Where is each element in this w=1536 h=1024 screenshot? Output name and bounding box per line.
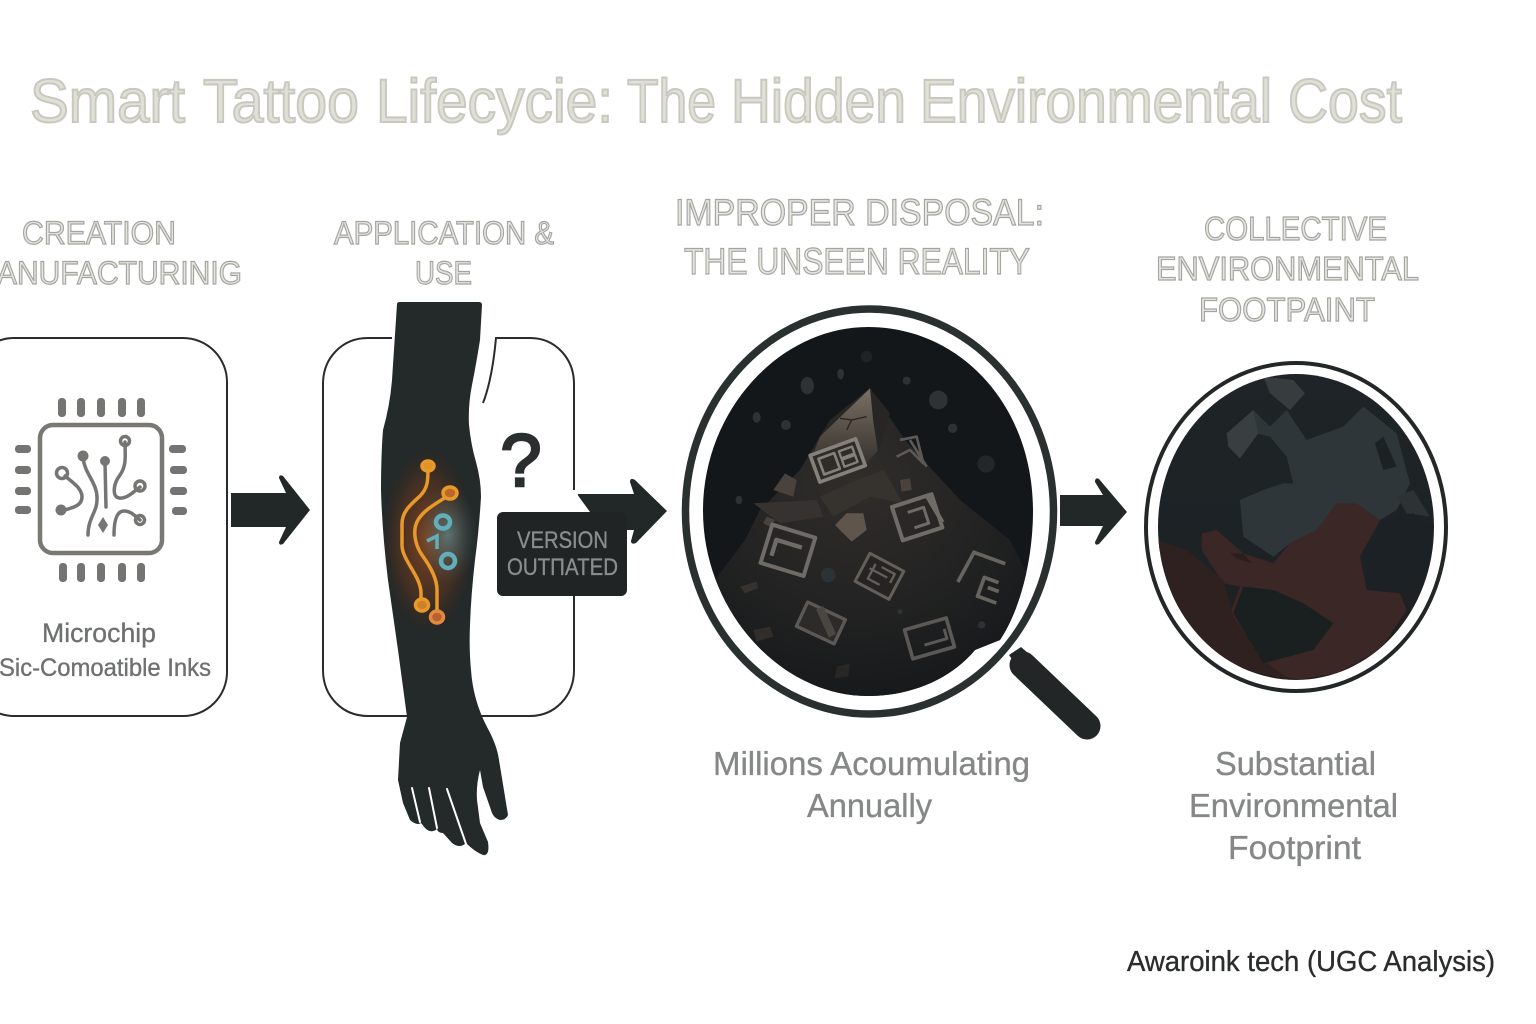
discarded tattoo chips [761, 437, 1010, 659]
title: Hidden [731, 67, 906, 135]
caption: microchip inks: Sic-Comoatible Inks [0, 654, 211, 682]
badge: version outdated: VERSION [517, 527, 608, 554]
heading: collective environmental footprint: ENVIRONMENTAL [1156, 250, 1419, 287]
title: Smart [30, 67, 185, 135]
arrow: application to disposal [578, 479, 667, 544]
heading: improper disposal [675, 192, 1044, 282]
title: Tattoo [203, 67, 359, 135]
heading: application and use: USE [415, 255, 472, 291]
arrow notch white [574, 490, 590, 512]
waste pile scene [700, 320, 1040, 700]
badge: version outdated [497, 512, 627, 596]
panel: application and use [323, 215, 667, 855]
gray continents [1227, 407, 1410, 557]
heading: improper disposal: THE UNSEEN REALITY [684, 241, 1030, 282]
caption: microchip inks [0, 618, 211, 682]
heading: collective environmental footprint: FOOTPAINT [1199, 291, 1375, 328]
icon: magnifying glass ring [686, 309, 1087, 726]
caption: millions accumulating: Millions Acoumulating [713, 745, 1030, 782]
dark landmasses [1233, 587, 1333, 663]
caption: millions accumulating: Annually [807, 787, 932, 824]
caption: substantial footprint: Environmental [1189, 787, 1398, 824]
finger gaps [412, 788, 466, 844]
caption: millions accumulating [713, 745, 1030, 824]
icon: question mark: ? [500, 419, 542, 502]
heading: collective environmental footprint [1156, 210, 1419, 328]
heading: collective environmental footprint: COLLECTIVE [1204, 210, 1387, 247]
tattoo glow [382, 448, 478, 632]
heading: application and use [334, 215, 554, 291]
badge: version outdated: OUTΠATED [507, 554, 618, 581]
caption: substantial footprint [1189, 745, 1398, 866]
panel: collective environmental footprint [1146, 210, 1446, 866]
floating particles [736, 351, 995, 629]
heading: creation manufacturing [0, 215, 242, 291]
circuit tattoo: orange traces [402, 461, 457, 623]
arrow: disposal to footprint [1060, 478, 1127, 545]
icon: globe [1150, 370, 1445, 685]
title: Environmental [920, 67, 1272, 135]
rubble pile [700, 388, 1040, 700]
panel: creation and manufacturing [0, 215, 242, 716]
title: Cost [1288, 67, 1402, 135]
arrow: creation to application [231, 475, 310, 545]
arm with hand [381, 302, 508, 855]
card outline [0, 338, 227, 716]
title [30, 67, 1402, 135]
icon: microchip [15, 398, 187, 582]
title: The [627, 67, 716, 135]
heading: improper disposal: IMPROPER DISPOSAL: [675, 192, 1044, 233]
caption: microchip inks: Microchip [42, 618, 156, 648]
heading: application and use: APPLICATION & [334, 215, 554, 251]
title: Lifecycie: [376, 67, 613, 135]
caption: substantial footprint: Substantial [1215, 745, 1376, 782]
circuit tattoo: blue nodes [427, 516, 455, 568]
card outline [323, 338, 574, 716]
peak and rocks [736, 351, 1010, 678]
caption: substantial footprint: Footprint [1228, 829, 1361, 866]
panel: improper disposal [675, 192, 1087, 824]
red-brown landmass [1202, 503, 1407, 680]
dark background [700, 320, 1040, 700]
source credit: Awaroink tech (UGC Analysis) [1127, 946, 1495, 978]
heading: creation manufacturing: CREATION [22, 215, 176, 251]
globe ring [1146, 363, 1446, 691]
